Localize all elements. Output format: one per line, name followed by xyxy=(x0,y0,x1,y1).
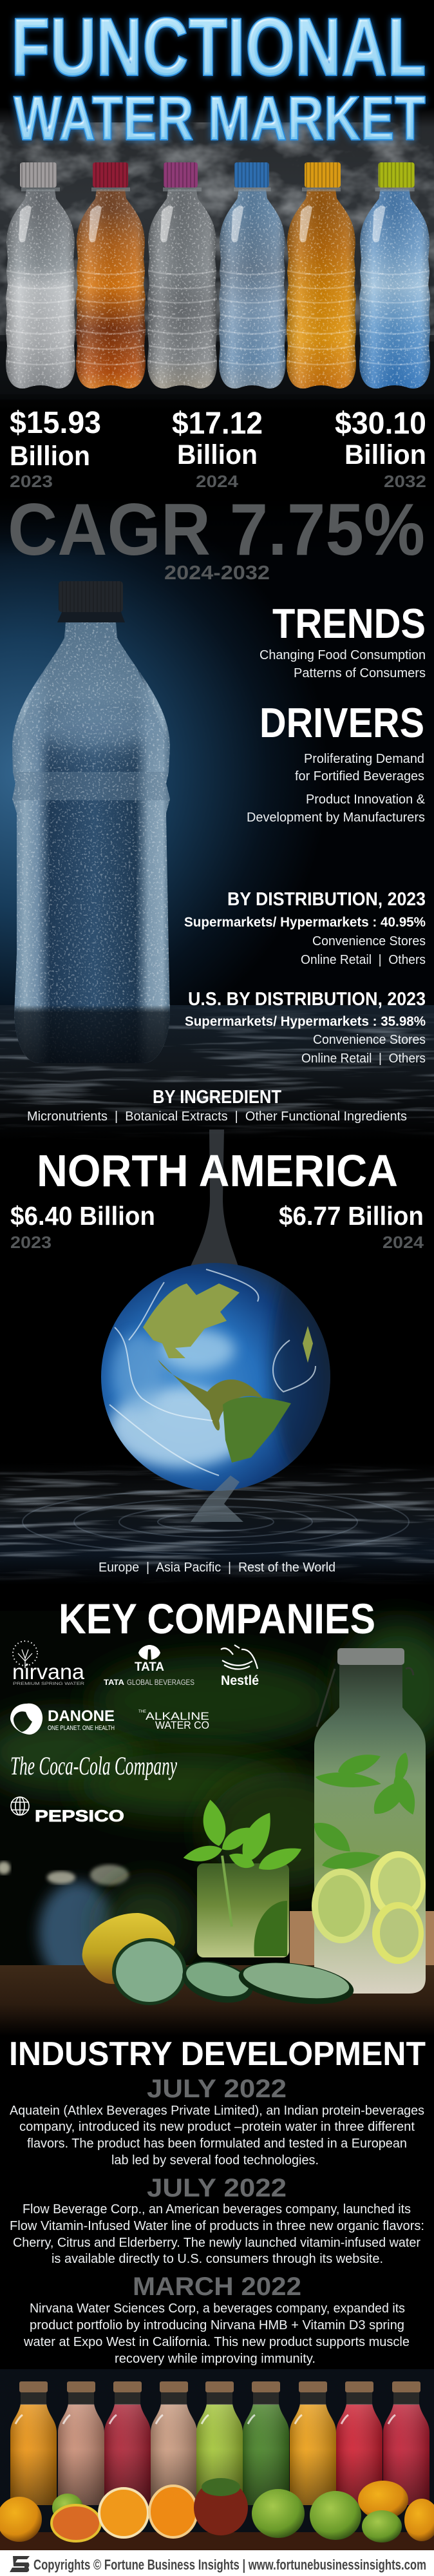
tall infused water jar xyxy=(308,1648,426,1994)
trends: Changing Food Consumption xyxy=(259,648,426,662)
development: July 2022 Flow Beverage: is available directly to U.S. consumers through its website. xyxy=(52,2252,383,2266)
development: March 2022 Nirvana: product portfolio by introducing Nirvana HMB + Vitamin D3 spring xyxy=(30,2318,404,2332)
fruit xyxy=(0,2478,434,2542)
market size 2023: 2023 xyxy=(10,472,53,491)
bottle: blue with lime cap xyxy=(359,162,430,391)
blue gradient backdrop xyxy=(0,496,434,1050)
development: March 2022 Nirvana: recovery while improving immunity. xyxy=(115,2352,316,2366)
market size 2023: $15.93 xyxy=(10,406,101,440)
drivers: Development by Manufacturers xyxy=(247,811,425,825)
logo: alkaline water co: ALKALINE xyxy=(146,1710,209,1722)
north america 2024 value: 2024 xyxy=(382,1233,424,1252)
large condensation bottle xyxy=(12,581,171,1067)
development: July 2022 Aquatein: lab led by several food technologies. xyxy=(111,2153,319,2167)
leaf continent: north america xyxy=(143,1283,240,1358)
market size 2023: Billion xyxy=(10,441,90,472)
drivers xyxy=(247,699,426,825)
logo: nirvana: PREMIUM SPRING WATER xyxy=(13,1682,84,1686)
logo: pepsico xyxy=(11,1797,124,1825)
leaf continent: central strand xyxy=(158,1360,263,1430)
US by distribution 2023: Convenience Stores xyxy=(313,1033,426,1047)
market size 2032 xyxy=(335,407,426,491)
north america 2023 value xyxy=(10,1201,155,1252)
development: July 2022 Aquatein xyxy=(10,2075,424,2167)
logo: nirvana xyxy=(12,1641,85,1686)
north america 2023 value: $6.40 Billion xyxy=(10,1201,155,1231)
title xyxy=(11,1,426,153)
bottle: amber xyxy=(287,162,356,391)
development: July 2022 Aquatein: JULY 2022 xyxy=(147,2075,287,2103)
bottle: clear with purple cap xyxy=(147,162,217,391)
leaf fragment on far side xyxy=(303,1326,313,1363)
by distribution 2023 xyxy=(184,889,426,967)
development: March 2022 Nirvana: MARCH 2022 xyxy=(133,2273,301,2301)
north america 2023 value: 2023 xyxy=(10,1233,52,1252)
US by distribution 2023: Online Retail | Others xyxy=(301,1052,426,1066)
trends: Patterns of Consumers xyxy=(294,666,426,680)
trends xyxy=(259,600,426,680)
development: March 2022 Nirvana: Nirvana Water Sciences Corp, a beverages company, expanded its xyxy=(30,2302,405,2316)
water stream above globe xyxy=(191,1129,238,1266)
industry development heading: INDUSTRY DEVELOPMENT xyxy=(9,2035,426,2073)
market size 2032: Billion xyxy=(344,439,426,470)
juice bottles row xyxy=(10,2381,429,2505)
logo: danone xyxy=(10,1704,115,1735)
logo: alkaline water co xyxy=(138,1710,209,1731)
market size 2032: $30.10 xyxy=(335,407,426,441)
market size 2024: Billion xyxy=(177,439,258,470)
by ingredient: BY INGREDIENT xyxy=(153,1087,281,1108)
icon: fortune business insights logo xyxy=(10,2556,30,2572)
footer strip xyxy=(0,2550,434,2576)
twisted water column beneath globe xyxy=(191,1475,243,1522)
background: black top with grey stone wall and wet table xyxy=(0,0,434,412)
logo: tata: TATA xyxy=(104,1678,124,1687)
water surface under bottle xyxy=(0,1005,434,1140)
development: March 2022 Nirvana xyxy=(23,2273,410,2366)
leaf continent: south america xyxy=(223,1397,291,1463)
development: July 2022 Flow Beverage: Flow Vitamin-Infused Water line of products in three new organic flavors: xyxy=(10,2219,424,2233)
logo: nirvana: nirvana xyxy=(12,1660,85,1684)
logo: alkaline water co: WATER CO xyxy=(155,1719,209,1731)
drivers: Product Innovation & xyxy=(306,793,426,807)
logo: nestle xyxy=(221,1645,259,1688)
ripple pool under globe xyxy=(0,1463,434,1585)
by distribution 2023: Convenience Stores xyxy=(312,934,426,948)
logo: alkaline water co: THE xyxy=(138,1710,146,1714)
development: July 2022 Flow Beverage: JULY 2022 xyxy=(147,2174,287,2202)
market size 2032: 2032 xyxy=(384,472,426,491)
market size 2024 xyxy=(172,407,263,491)
by ingredient xyxy=(27,1087,407,1124)
drivers: Proliferating Demand xyxy=(304,752,424,766)
north america 2024 value: $6.77 Billion xyxy=(279,1201,424,1231)
cucumber slices xyxy=(112,1938,356,2010)
green garden background xyxy=(0,1611,434,2036)
US by distribution 2023: Supermarkets/ Hypermarkets : 35.98% xyxy=(185,1014,426,1029)
juice bottles and fruit scene xyxy=(0,2369,434,2550)
bottle: orange with red cap xyxy=(76,162,146,391)
mint glass xyxy=(181,1798,307,1957)
development: March 2022 Nirvana: water at Expo West in California. This new product supports muscle xyxy=(23,2335,410,2349)
by distribution 2023: Online Retail | Others xyxy=(301,953,426,967)
drivers: for Fortified Beverages xyxy=(295,769,424,783)
logo: tata: TATA xyxy=(135,1660,164,1674)
bottle: clear xyxy=(6,162,75,391)
north america heading: NORTH AMERICA xyxy=(37,1146,398,1196)
logo: danone: DANONE xyxy=(48,1707,115,1725)
market size 2023 xyxy=(10,406,101,491)
development: July 2022 Aquatein: company, introduced its new product –protein water in three different xyxy=(19,2120,415,2134)
logo: coca-cola company: The Coca-Cola Company xyxy=(10,1751,177,1780)
development: July 2022 Flow Beverage xyxy=(10,2174,424,2266)
US by distribution 2023 xyxy=(185,989,426,1066)
europe, asia pacific, rest of world: Europe | Asia Pacific | Rest of the World xyxy=(99,1561,335,1575)
logo: tata: GLOBAL BEVERAGES xyxy=(127,1678,194,1687)
bottle: pale blue xyxy=(219,162,286,391)
water globe xyxy=(101,1256,339,1491)
by distribution 2023: Supermarkets/ Hypermarkets : 40.95% xyxy=(184,915,426,930)
fade below bottles xyxy=(0,394,434,427)
development: July 2022 Aquatein: flavors. The product has been formulated and tested in a European xyxy=(27,2137,407,2151)
lemon xyxy=(82,1913,175,1984)
development: July 2022 Flow Beverage: Cherry, Citrus and Elderberry. The newly launched vitamin-infused water xyxy=(13,2236,420,2250)
logo: pepsico: PEPSICO xyxy=(35,1807,124,1825)
logo: nestle: Nestlé xyxy=(221,1673,259,1688)
CAGR figure: 2024-2032 xyxy=(164,561,270,584)
market size 2024: $17.12 xyxy=(172,407,263,441)
development: July 2022 Aquatein: Aquatein (Athlex Beverages Private Limited), an Indian protein-beverages xyxy=(10,2104,424,2118)
logo: tata xyxy=(104,1645,194,1687)
six coloured water bottles xyxy=(6,162,430,391)
development: July 2022 Flow Beverage: Flow Beverage Corp., an American beverages company, launched its xyxy=(23,2202,411,2216)
logo: danone: ONE PLANET. ONE HEALTH xyxy=(48,1724,115,1732)
market size 2024: 2024 xyxy=(196,472,239,491)
by ingredient: Micronutrients | Botanical Extracts | Other Functional Ingredients xyxy=(27,1110,407,1124)
north america 2024 value xyxy=(279,1201,424,1252)
key companies heading: KEY COMPANIES xyxy=(59,1595,375,1642)
